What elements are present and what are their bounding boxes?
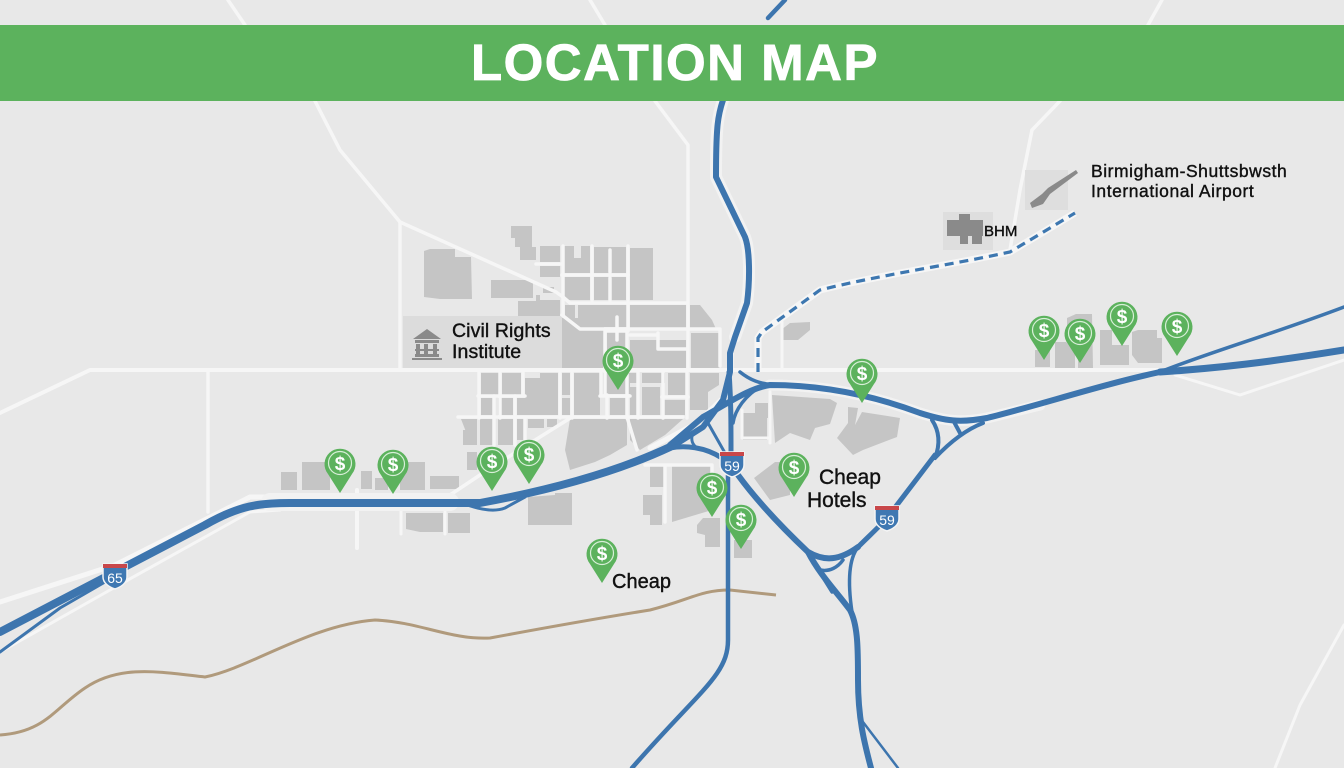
pin: south centre 2 [726,505,756,549]
pin: west 1 [324,449,356,493]
title: LOCATION MAP [471,34,879,91]
city building blocks [281,226,1162,558]
N-S vertical [729,372,731,453]
highway shield: I-65: 65 [107,570,123,586]
frontage loop [462,497,525,510]
pin: east 4 [1162,312,1192,356]
highway shield: I-59 centre: 59 [724,458,740,474]
pin: downtown [602,346,634,390]
label: airport: International Airport [1091,181,1254,201]
label: BHM: BHM [984,223,1017,240]
I-65 main line [0,447,670,632]
pin: east 2 [1064,319,1096,363]
highway shield: I-59 centre [720,452,744,477]
south freeway [808,552,871,768]
pin: downtown: $ [613,351,624,372]
highway shield: I-59 east: 59 [879,512,895,528]
river [0,590,776,735]
pin: west 2: $ [388,455,399,476]
pin: east 2: $ [1075,324,1086,345]
pin: west 2 [378,450,408,494]
highway shield: I-65 [103,564,127,589]
label: cheap: Cheap [612,571,671,593]
label: cheap hotels: Cheap [819,466,881,489]
north section [768,0,785,18]
pin: cheap hotels: $ [789,458,800,479]
pin: cheap: $ [597,544,608,565]
label: airport: Birmigham-Shuttsbwsth [1091,161,1287,181]
pin: west 3 [476,447,508,491]
north N-S route [670,100,749,448]
icon: BHM terminal [943,212,993,250]
icon: airport runway [1025,170,1078,210]
pin: south centre 1: $ [707,478,718,499]
label: civil rights institute: Civil Rights [452,320,551,342]
pin: cheap [586,539,618,583]
pin: east 3 [1106,302,1138,346]
I-59 east [1160,350,1344,372]
pin: cheap hotels [778,453,810,497]
pin: west 3: $ [487,452,498,473]
pin: east 1: $ [1039,321,1050,342]
pin: north of I-59 [846,359,878,403]
pin: west 1: $ [335,454,346,475]
pin: south centre 1 [696,473,728,517]
pin: east 3: $ [1117,307,1128,328]
highway shield: I-59 east [875,506,899,531]
pin: east 1 [1028,316,1060,360]
label: civil rights institute: Institute [452,341,521,363]
south loop [738,475,858,558]
central interchange links [670,447,722,458]
I-65 west branch [0,582,105,652]
civil rights label area [403,316,563,368]
pin: north of I-59: $ [857,364,868,385]
title banner [0,25,1344,101]
icon: civil rights institute [412,329,442,360]
pin: west 4: $ [524,445,535,466]
south N-S route [632,475,728,768]
pin: west 4 [514,440,544,484]
white casing [270,100,1040,502]
pin: south centre 2: $ [736,510,747,531]
pin: east 4: $ [1172,317,1183,338]
airport connector road (dashed) [758,213,1075,372]
label: cheap hotels: Hotels [807,489,867,512]
